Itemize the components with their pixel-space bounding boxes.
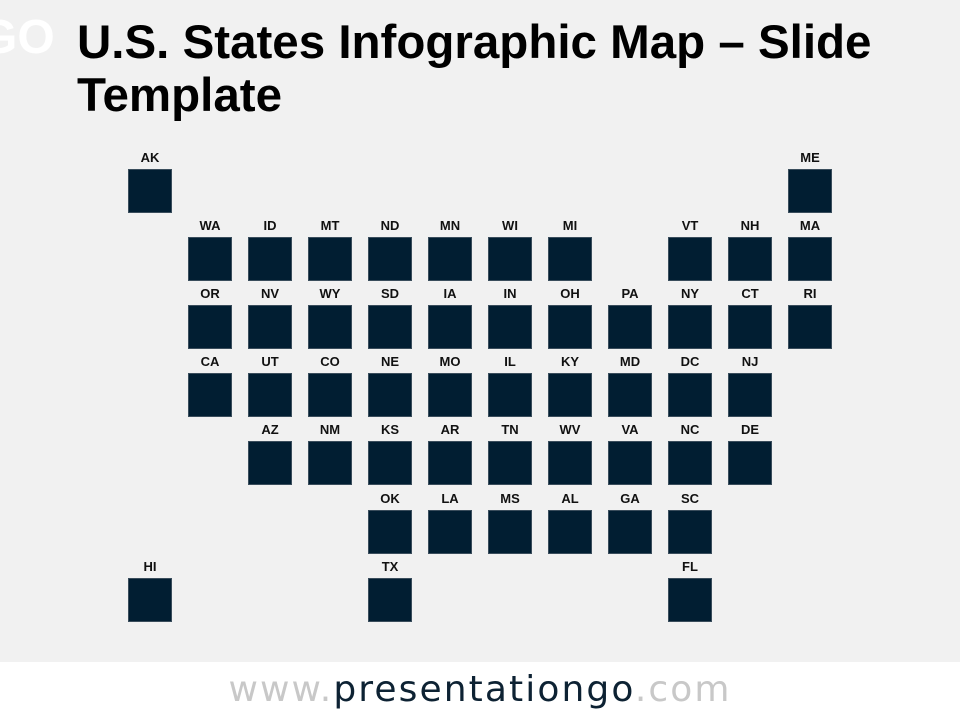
TN: [488, 422, 532, 485]
footer: [0, 662, 960, 720]
VA: [608, 423, 652, 485]
footer url: www.presentationgo.com: [228, 669, 732, 710]
MN: MN: [440, 218, 460, 233]
FL: [668, 560, 712, 622]
IN: IN: [504, 286, 516, 301]
DC: DC: [681, 354, 699, 369]
PA: [608, 286, 652, 349]
UT: UT: [261, 354, 279, 369]
title: Template: [77, 69, 282, 122]
RI: RI: [804, 286, 816, 301]
SD: SD: [381, 286, 399, 301]
MT: [308, 218, 352, 281]
IL: IL: [504, 354, 516, 369]
OH: OH: [560, 286, 580, 301]
DE: DE: [741, 422, 759, 437]
HI: [128, 560, 172, 622]
OK: [368, 492, 412, 554]
MO: [428, 354, 472, 417]
LA: LA: [441, 491, 459, 506]
KS: [368, 422, 412, 485]
MS: MS: [500, 491, 520, 506]
SC: SC: [681, 491, 699, 506]
KY: [548, 354, 592, 417]
NY: [668, 286, 712, 349]
title: U.S. States Infographic Map – Slide: [77, 16, 871, 69]
title: [77, 16, 871, 122]
NJ: NJ: [742, 354, 758, 369]
VA: VA: [621, 422, 639, 437]
IN: [488, 286, 532, 349]
GA: GA: [620, 491, 640, 506]
DC: [668, 354, 712, 417]
SC: [668, 492, 712, 554]
WV: [548, 423, 592, 485]
WA: [188, 218, 232, 281]
AZ: AZ: [261, 422, 279, 437]
ME: [788, 150, 832, 213]
MA: [788, 218, 832, 281]
MD: [608, 354, 652, 417]
AK: [128, 150, 172, 213]
WI: [488, 218, 532, 281]
ME: ME: [800, 150, 820, 165]
NE: [368, 354, 412, 417]
AR: AR: [441, 422, 459, 437]
WI: WI: [502, 218, 518, 233]
OR: [188, 286, 232, 349]
AZ: [248, 422, 292, 485]
UT: [248, 354, 292, 417]
CT: [728, 286, 772, 349]
WY: WY: [320, 286, 340, 301]
NE: NE: [381, 354, 399, 369]
OK: OK: [380, 491, 400, 506]
VT: VT: [682, 218, 698, 233]
MI: [548, 218, 592, 281]
NH: NH: [741, 218, 759, 233]
LA: [428, 492, 472, 554]
GA: [608, 492, 652, 554]
CO: CO: [320, 354, 340, 369]
NC: NC: [681, 422, 699, 437]
NV: NV: [261, 286, 279, 301]
AL: AL: [561, 491, 579, 506]
ND: ND: [381, 218, 399, 233]
AK: AK: [141, 150, 159, 165]
CA: CA: [201, 354, 219, 369]
NV: [248, 286, 292, 349]
KY: KY: [561, 354, 579, 369]
AR: [428, 422, 472, 485]
NH: [728, 218, 772, 281]
AL: [548, 492, 592, 554]
FL: FL: [682, 559, 698, 574]
ID: [248, 218, 292, 281]
WY: [308, 286, 352, 349]
NM: [308, 422, 352, 485]
CA: [188, 354, 232, 417]
KS: KS: [381, 422, 399, 437]
SD: [368, 286, 412, 349]
RI: [788, 286, 832, 349]
MO: MO: [440, 354, 460, 369]
NM: NM: [320, 422, 340, 437]
NJ: [728, 354, 772, 417]
IA: IA: [444, 286, 456, 301]
VT: [668, 218, 712, 281]
IA: [428, 286, 472, 349]
ID: ID: [264, 218, 276, 233]
MN: [428, 218, 472, 281]
PA: PA: [621, 286, 639, 301]
NY: NY: [681, 286, 699, 301]
OR: OR: [200, 286, 220, 301]
state grid map: [128, 150, 832, 622]
NC: [668, 423, 712, 485]
WA: WA: [200, 218, 220, 233]
MD: MD: [620, 354, 640, 369]
TN: TN: [501, 422, 519, 437]
OH: [548, 286, 592, 349]
IL: [488, 354, 532, 417]
TX: [368, 560, 412, 622]
CO: [308, 354, 352, 417]
DE: [728, 423, 772, 485]
WV: WV: [560, 422, 580, 437]
MS: [488, 492, 532, 554]
HI: HI: [144, 559, 156, 574]
MI: MI: [563, 218, 577, 233]
CT: CT: [741, 286, 759, 301]
MA: MA: [800, 218, 820, 233]
MT: MT: [321, 218, 339, 233]
ND: [368, 218, 412, 281]
TX: TX: [382, 559, 398, 574]
